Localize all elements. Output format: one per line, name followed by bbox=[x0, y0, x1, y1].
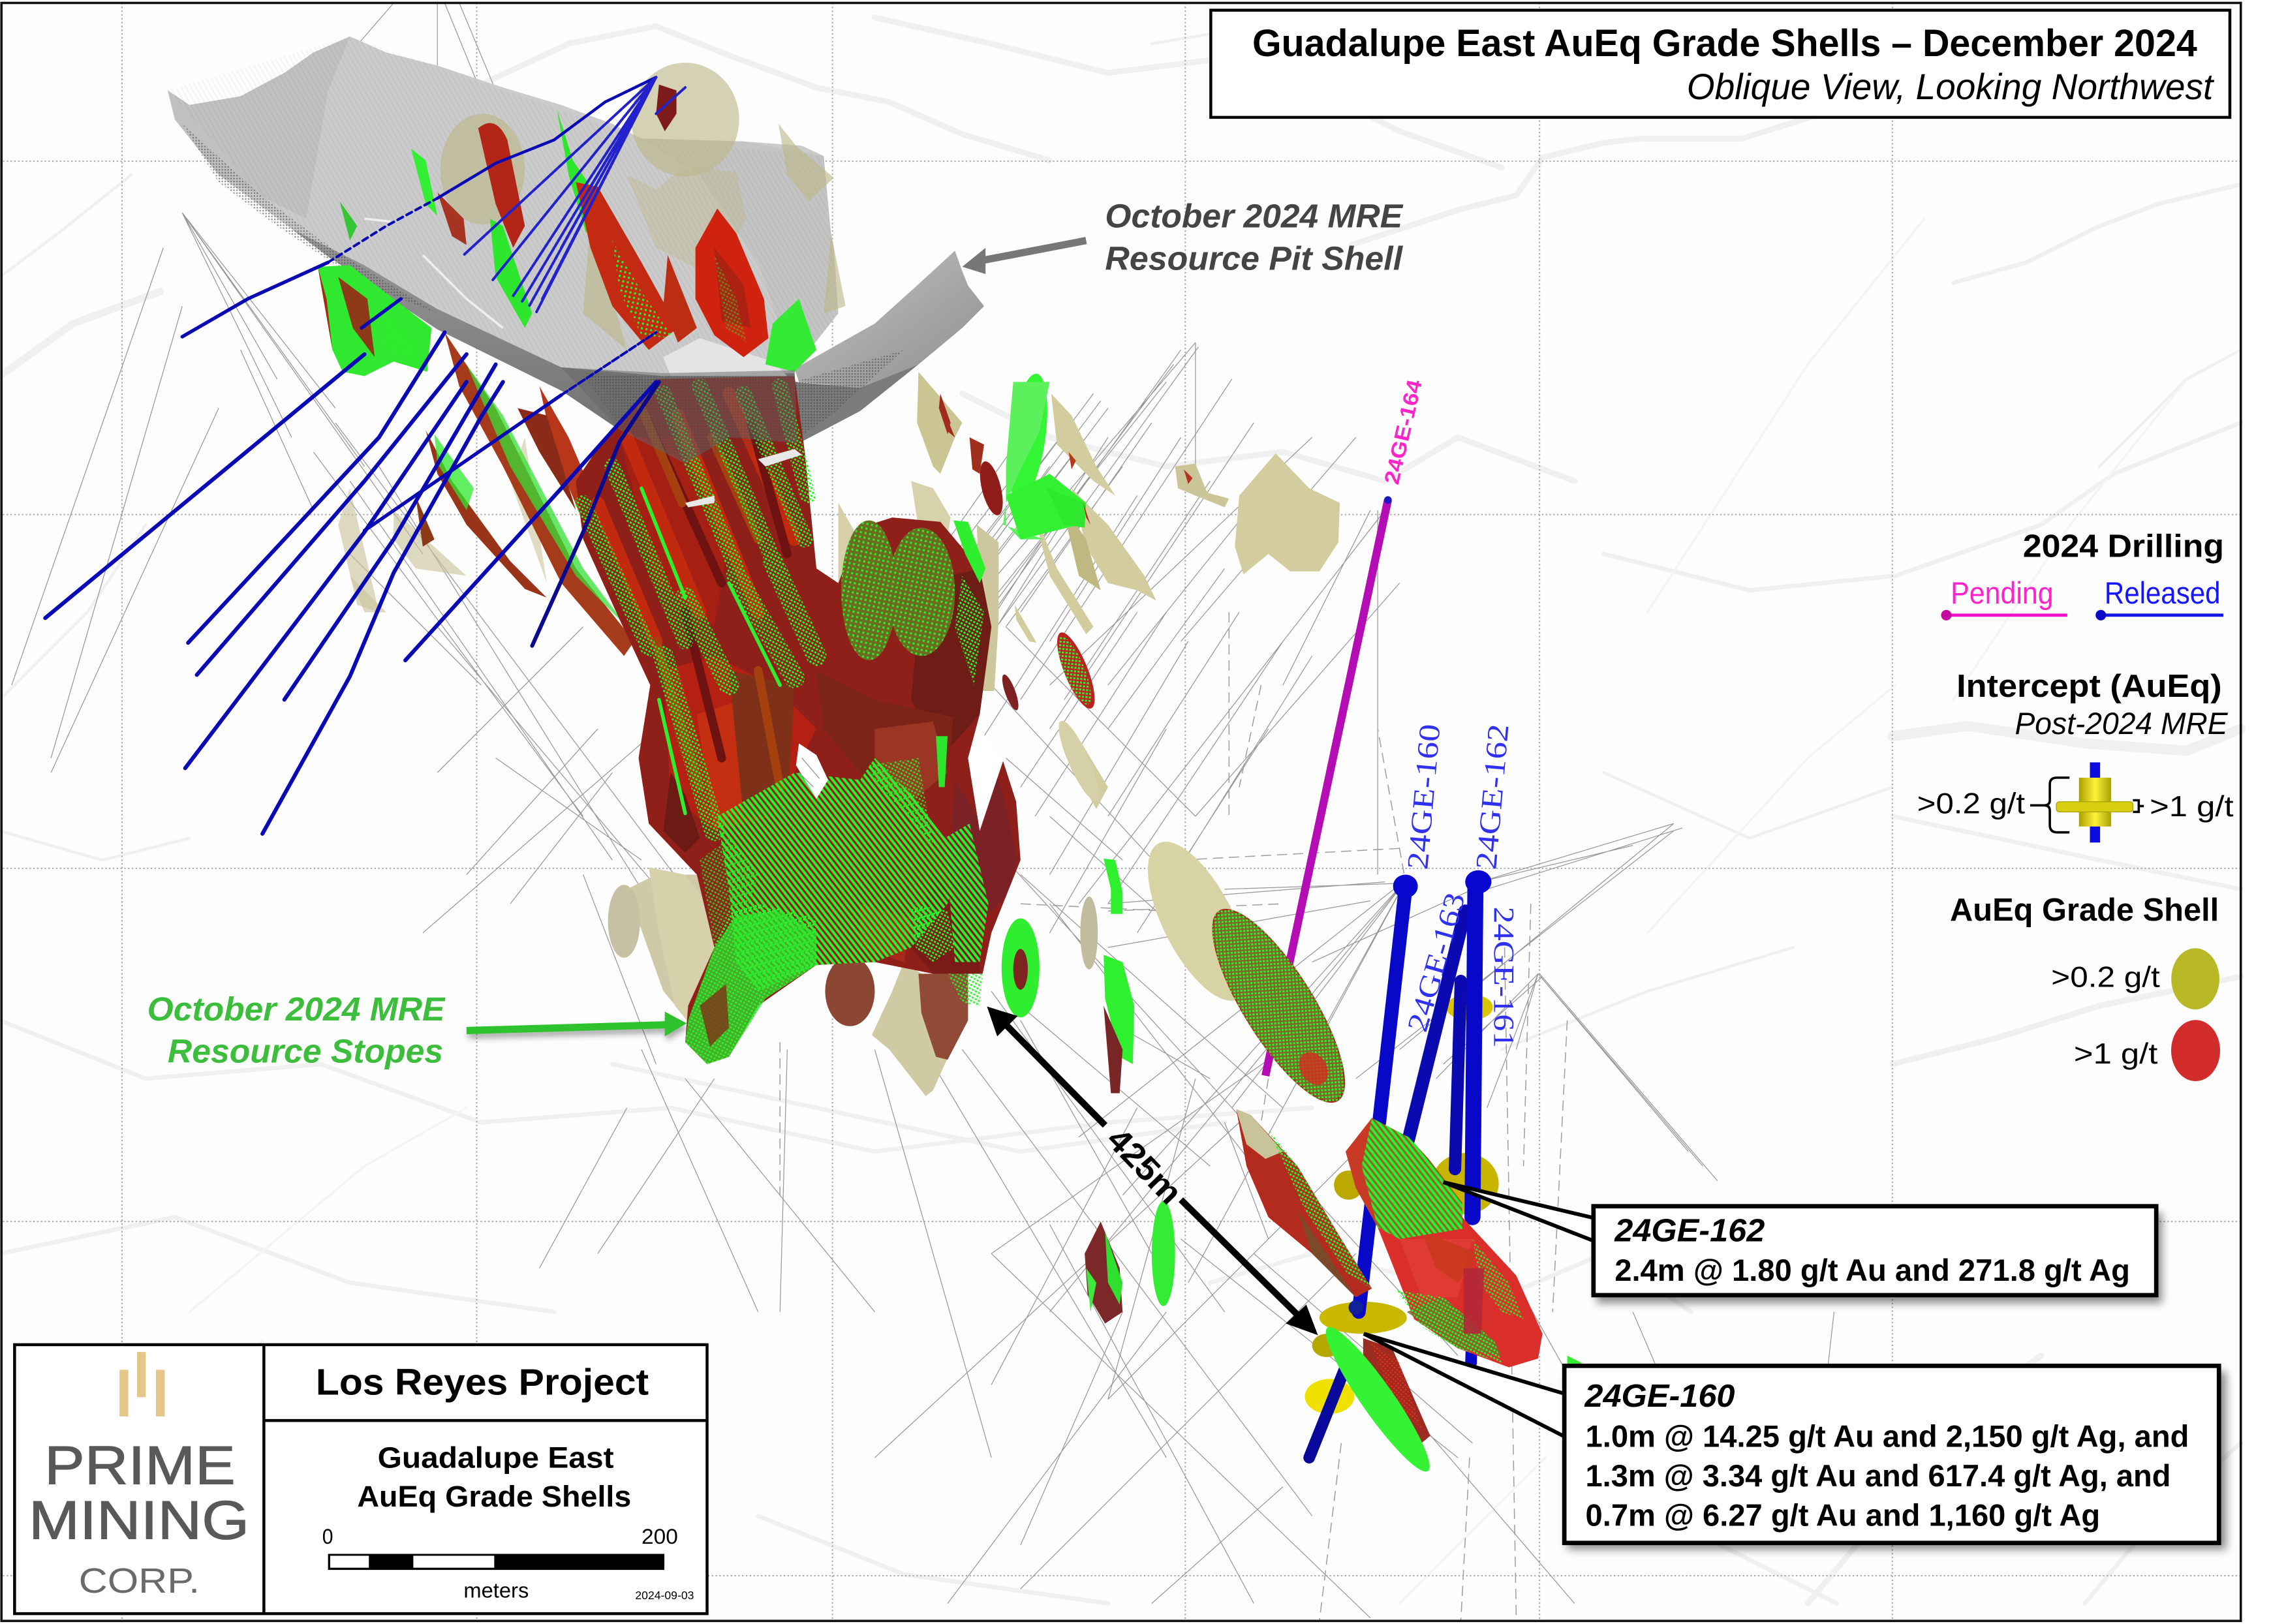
arrow: to resource stopes bbox=[467, 1011, 687, 1036]
drill holes: released 2024 holes western fan bbox=[45, 77, 659, 834]
arrow: 425m distance bbox=[987, 1007, 1318, 1335]
legend: intercept AuEq: >0.2 g/t bbox=[1917, 788, 2026, 820]
callout leader: 24GE-160 bbox=[1364, 1334, 1569, 1439]
label: 24GE-163: 24GE-163 bbox=[1400, 889, 1472, 1035]
subheading: Guadalupe East AuEq Grade Shells bbox=[357, 1441, 631, 1513]
legend: AuEq grade shell: AuEq Grade Shell bbox=[1950, 893, 2219, 928]
arrow: to pit shell bbox=[962, 241, 1086, 274]
stopes: blades beneath pit bbox=[318, 85, 816, 656]
logo: Prime Mining Corp: CORP. bbox=[79, 1561, 200, 1601]
title box: Oblique View, Looking Northwest bbox=[1687, 66, 2215, 107]
heading: Los Reyes Project: Los Reyes Project bbox=[316, 1362, 649, 1403]
drill holes: fan at north hub bbox=[463, 77, 685, 312]
label: 24GE-162: 24GE-162 bbox=[1469, 723, 1515, 871]
shell: scattered shells and stopes east of pit bbox=[939, 371, 1192, 712]
stopes: central resource stope body and red grade shells bbox=[561, 367, 1021, 1096]
drill hole: pending 24GE-164 bbox=[1265, 496, 1392, 1076]
callout leader: 24GE-162 bbox=[1444, 1182, 1596, 1242]
legend: 2024 drilling bbox=[1941, 529, 2224, 620]
legend: AuEq grade shell bbox=[1950, 893, 2220, 1081]
label: October 2024 MRE resource pit shell: Resource Pit Shell bbox=[1105, 239, 1404, 277]
label: 24GE-161: 24GE-161 bbox=[1488, 907, 1521, 1048]
drill holes: released 24GE-160 to 24GE-163 bbox=[1309, 885, 1475, 1458]
label: 24GE-164: 24GE-164 bbox=[1380, 378, 1427, 487]
legend: 2024 drilling: 2024 Drilling bbox=[2023, 529, 2224, 564]
tan and red shell near the magenta drill hole bbox=[1128, 827, 1582, 1370]
label: 24GE-160: 24GE-160 bbox=[1400, 723, 1447, 871]
drill hole collars bbox=[1349, 870, 1491, 1315]
legend: AuEq grade shell: >0.2 g/t bbox=[2051, 961, 2160, 993]
logo: Prime Mining Corp: PRIME bbox=[44, 1434, 236, 1495]
intercept discs on drill holes bbox=[1305, 994, 1499, 1414]
shell: tan grade shells over the pit bbox=[338, 63, 846, 612]
legend: intercept AuEq: Intercept (AuEq) bbox=[1956, 669, 2222, 704]
callout: 24GE-162 bbox=[1594, 1206, 2162, 1303]
callout: 24GE-160: 24GE-160 bbox=[1584, 1379, 1735, 1414]
callout: 24GE-160: 1.0m @ 14.25 g/t Au and 2,150 g/t Ag, and bbox=[1586, 1419, 2189, 1453]
panel: project info block bbox=[14, 1345, 707, 1614]
scale bar: 2024-09-03 bbox=[635, 1589, 694, 1602]
shell: tan shells east of pit bbox=[839, 372, 1340, 809]
scale bar: meters bbox=[463, 1579, 529, 1602]
title box bbox=[1211, 10, 2230, 117]
callout: 24GE-162: 24GE-162 bbox=[1614, 1214, 1765, 1249]
logo: Prime Mining Corp bbox=[29, 1352, 249, 1601]
drill traces: grey historical holes bbox=[12, 3, 1834, 1618]
callout: 24GE-160: 0.7m @ 6.27 g/t Au and 1,160 g/t Ag bbox=[1586, 1498, 2100, 1532]
legend: intercept AuEq: >1 g/t bbox=[2150, 791, 2234, 823]
callout: 24GE-162: 2.4m @ 1.80 g/t Au and 271.8 g/t Ag bbox=[1614, 1253, 2130, 1287]
logo: Prime Mining Corp: MINING bbox=[29, 1489, 249, 1550]
shell: lower large red-green shell at 24GE-162 bbox=[1346, 1118, 1543, 1368]
label: October 2024 MRE resource stopes bbox=[147, 990, 446, 1070]
legend: 2024 drilling: Released bbox=[2105, 576, 2220, 610]
grade shell lobes east side bbox=[841, 521, 897, 660]
stopes: small stope lenses south of body bbox=[1002, 717, 1175, 1324]
subheading: Guadalupe East AuEq Grade Shells: AuEq Grade Shells bbox=[357, 1480, 631, 1513]
label: 425m: 425m bbox=[1100, 1120, 1190, 1212]
scale bar: 0 bbox=[322, 1525, 333, 1548]
label: October 2024 MRE resource stopes: Resource Stopes bbox=[168, 1032, 443, 1070]
label: October 2024 MRE resource pit shell: October 2024 MRE bbox=[1105, 197, 1404, 235]
callout: 24GE-160 bbox=[1564, 1366, 2226, 1550]
scale bar: 200 bbox=[641, 1525, 678, 1548]
label: October 2024 MRE resource pit shell bbox=[1105, 197, 1404, 277]
shell: thin red shell near 24GE-160 bbox=[1236, 1109, 1441, 1480]
shell: red-green grade shell overlapping hole bbox=[1190, 892, 1368, 1120]
title box: Guadalupe East AuEq Grade Shells – December 2024 bbox=[1252, 22, 2197, 65]
legend: intercept AuEq: Post-2024 MRE bbox=[2015, 707, 2228, 741]
legend: 2024 drilling: Pending bbox=[1951, 576, 2054, 610]
callout: 24GE-160: 1.3m @ 3.34 g/t Au and 617.4 g/t Ag, and bbox=[1586, 1459, 2171, 1493]
scale bar bbox=[322, 1525, 694, 1602]
legend: AuEq grade shell: >1 g/t bbox=[2074, 1038, 2158, 1070]
subheading: Guadalupe East AuEq Grade Shells: Guadalupe East bbox=[378, 1441, 614, 1474]
legend: intercept AuEq bbox=[1917, 669, 2234, 842]
pit shell: October 2024 resource pit shell bbox=[168, 37, 984, 463]
label: October 2024 MRE resource stopes: October 2024 MRE bbox=[147, 990, 446, 1028]
